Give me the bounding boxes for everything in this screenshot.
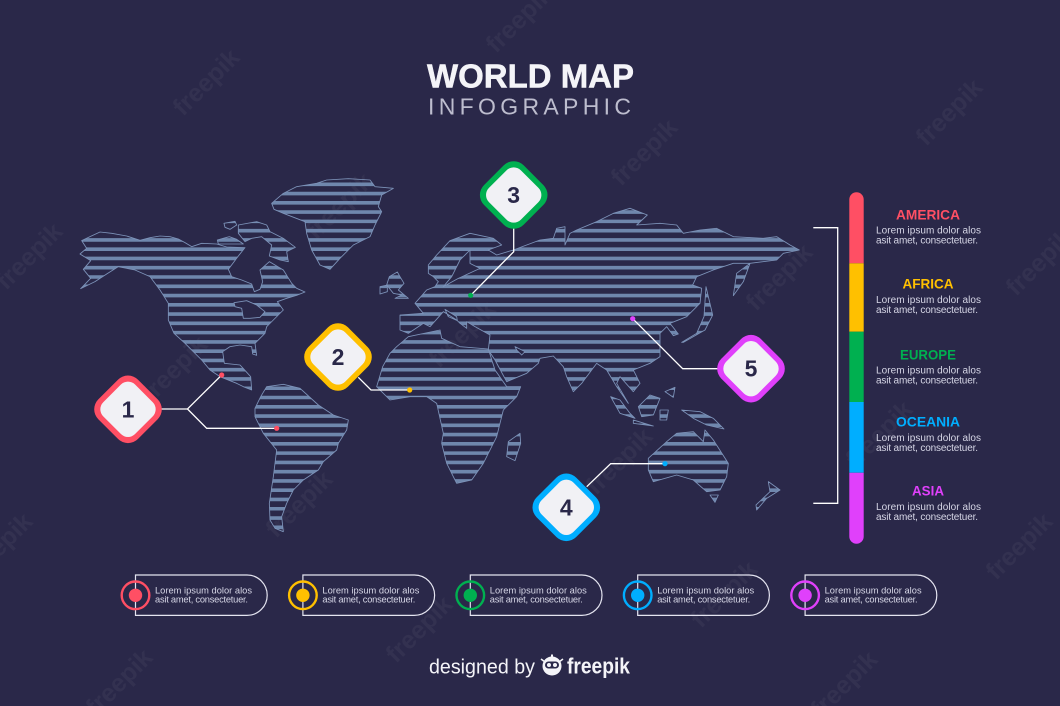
marker 4 dot xyxy=(662,461,668,466)
marker 5 connector xyxy=(633,319,718,369)
marker 4 connector xyxy=(587,464,665,487)
marker 2 xyxy=(298,317,378,397)
bottom card 5 xyxy=(791,575,937,615)
bottom card 1 xyxy=(122,575,267,615)
bottom card 1: Lorem ipsum dolor alos xyxy=(155,585,252,595)
title: WORLD MAP xyxy=(427,58,634,94)
footer credit xyxy=(429,654,631,678)
legend: europe xyxy=(876,347,981,387)
watermarks: freepik xyxy=(423,295,501,373)
legend: europe: asit amet, consectetuer. xyxy=(876,376,978,387)
footer credit: designed by xyxy=(429,656,535,678)
title xyxy=(427,58,634,120)
marker 4: 4 xyxy=(560,494,573,520)
marker 5: 5 xyxy=(745,356,758,382)
bottom card 4: Lorem ipsum dolor alos xyxy=(657,585,755,595)
bottom card 4: asit amet, consectetuer. xyxy=(657,595,750,605)
bottom card 4 xyxy=(624,575,769,615)
bracket xyxy=(813,228,838,503)
marker 3 connector xyxy=(471,228,514,295)
bottom card 2 xyxy=(289,575,435,615)
marker 2: 2 xyxy=(332,344,344,370)
legend: africa xyxy=(876,276,981,316)
legend: asia: asit amet, consectetuer. xyxy=(876,512,978,523)
marker 3: 3 xyxy=(507,182,520,208)
marker 2 dot xyxy=(407,387,412,393)
map outline: americas and greenland xyxy=(80,179,393,532)
legend: asia: Lorem ipsum dolor alos xyxy=(876,502,981,513)
footer credit: freepik xyxy=(567,654,631,678)
legend: asia: ASIA xyxy=(912,483,944,499)
watermarks: freepik xyxy=(910,73,988,151)
legend: america: AMERICA xyxy=(896,206,960,222)
legend: europe: EUROPE xyxy=(900,347,956,363)
icon: freepik mascot xyxy=(541,654,563,676)
legend: asia xyxy=(876,483,981,523)
colour bar xyxy=(849,192,864,544)
title: INFOGRAPHIC xyxy=(428,94,631,120)
legend: oceania: OCEANIA xyxy=(896,414,960,430)
legend: africa: Lorem ipsum dolor alos xyxy=(876,295,981,306)
watermarks: freepik xyxy=(167,43,245,121)
marker 1 dots xyxy=(219,372,279,431)
legend: oceania: asit amet, consectetuer. xyxy=(876,443,978,454)
bottom card 2: asit amet, consectetuer. xyxy=(322,595,415,605)
legend: oceania: Lorem ipsum dolor alos xyxy=(876,433,981,444)
map outline: eurasia, africa, oceania xyxy=(377,208,799,510)
marker 3 xyxy=(474,155,553,235)
bottom card 5: asit amet, consectetuer. xyxy=(825,595,918,605)
legend: america: Lorem ipsum dolor alos xyxy=(876,226,981,237)
watermarks: freepik xyxy=(980,507,1058,585)
legend: africa: AFRICA xyxy=(902,276,954,292)
watermarks: freepik xyxy=(685,555,763,633)
marker 5 xyxy=(711,329,791,408)
bottom card 1: asit amet, consectetuer. xyxy=(155,595,248,605)
marker 1: 1 xyxy=(122,396,135,422)
bottom card 5: Lorem ipsum dolor alos xyxy=(825,585,922,595)
legend: africa: asit amet, consectetuer. xyxy=(876,305,978,316)
marker 1 connector xyxy=(161,375,277,428)
legend: america: asit amet, consectetuer. xyxy=(876,236,978,247)
legend: europe: Lorem ipsum dolor alos xyxy=(876,366,981,377)
watermarks: freepik xyxy=(580,422,658,500)
bottom card 2: Lorem ipsum dolor alos xyxy=(322,585,420,595)
marker 1 xyxy=(88,370,168,449)
watermarks: freepik xyxy=(840,395,918,473)
legend: oceania xyxy=(876,414,981,454)
marker 4 xyxy=(527,468,606,547)
marker 5 dot xyxy=(630,316,635,321)
bottom card 3 xyxy=(456,575,602,615)
map stripes xyxy=(60,182,820,529)
marker 3 dot xyxy=(468,293,473,298)
watermarks: freepik xyxy=(260,465,338,543)
watermarks: freepik xyxy=(135,330,213,408)
watermarks: freepik xyxy=(605,113,683,191)
bottom card 3: asit amet, consectetuer. xyxy=(490,595,583,605)
world map xyxy=(60,179,820,532)
legend: america xyxy=(876,206,981,247)
watermarks: freepik xyxy=(300,167,378,245)
bottom card 3: Lorem ipsum dolor alos xyxy=(490,585,587,595)
watermarks: freepik xyxy=(740,238,818,316)
marker 2 connector xyxy=(358,377,410,390)
watermarks: freepik xyxy=(380,590,458,668)
